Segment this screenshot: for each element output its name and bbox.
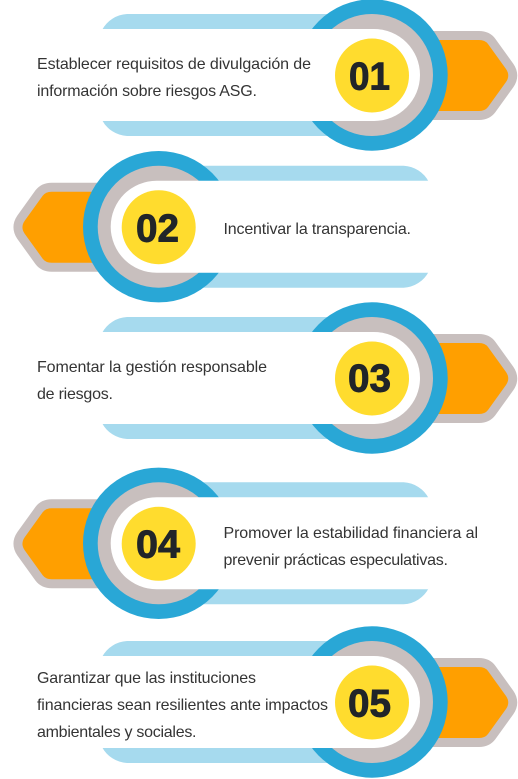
white text bar xyxy=(102,29,420,121)
light blue band xyxy=(102,641,372,763)
white text bar xyxy=(102,656,420,748)
arrow: left 04 xyxy=(22,508,101,579)
light blue band xyxy=(159,166,429,288)
text: item 01: información sobre riesgos ASG. xyxy=(37,83,257,100)
number 04: 04 xyxy=(136,524,180,566)
shapes: item 05 xyxy=(102,626,508,778)
panel: item 04 xyxy=(22,468,478,619)
text: item 05: Garantizar que las instituciones xyxy=(37,670,256,687)
arrow: right 05 xyxy=(430,667,508,738)
panel: item 05 xyxy=(37,626,508,778)
shapes: item 02 xyxy=(22,151,429,302)
yellow number disc xyxy=(335,38,409,112)
text: item 03: Fomentar la gestión responsable xyxy=(37,359,267,376)
light blue band xyxy=(159,482,429,604)
text: item 04: Promover la estabilidad financiera al xyxy=(224,525,478,542)
grey ring xyxy=(98,482,220,604)
light blue band xyxy=(102,317,372,439)
white text bar xyxy=(111,497,429,589)
text: item 02: Incentivar la transparencia. xyxy=(224,221,411,238)
shapes: item 03 xyxy=(102,302,508,454)
text: item 03: de riesgos. xyxy=(37,386,113,403)
yellow number disc xyxy=(122,507,196,581)
grey ring xyxy=(311,641,433,763)
blue ring xyxy=(296,626,448,778)
blue ring xyxy=(296,302,448,454)
arrow: right 01 xyxy=(430,40,508,111)
panel: item 01 xyxy=(37,0,508,151)
number 03: 03 xyxy=(348,358,391,400)
number 01: 01 xyxy=(349,55,390,98)
grey ring xyxy=(311,317,433,439)
blue ring xyxy=(83,468,234,619)
light blue band xyxy=(102,14,372,136)
text: item 04: prevenir prácticas especulativas. xyxy=(224,552,448,569)
yellow number disc xyxy=(335,666,409,740)
white text bar xyxy=(111,181,429,273)
panel: item 02 xyxy=(22,151,429,302)
text: item 01: Establecer requisitos de divulgación de xyxy=(37,56,311,73)
number 05: 05 xyxy=(348,682,391,726)
grey ring xyxy=(311,14,433,136)
arrow: right 03 xyxy=(430,343,508,414)
arrow: left 02 xyxy=(22,192,101,263)
panel: item 03 xyxy=(37,302,508,454)
yellow number disc xyxy=(335,342,409,416)
shapes: item 01 xyxy=(102,0,508,151)
text: item 05: ambientales y sociales. xyxy=(37,724,196,741)
yellow number disc xyxy=(122,190,196,264)
white text bar xyxy=(102,332,420,424)
number 02: 02 xyxy=(136,207,179,250)
text: item 05: financieras sean resilientes ante impactos xyxy=(37,697,328,714)
shapes: item 04 xyxy=(22,468,429,619)
blue ring xyxy=(83,151,234,302)
grey ring xyxy=(98,166,220,288)
blue ring xyxy=(296,0,448,151)
